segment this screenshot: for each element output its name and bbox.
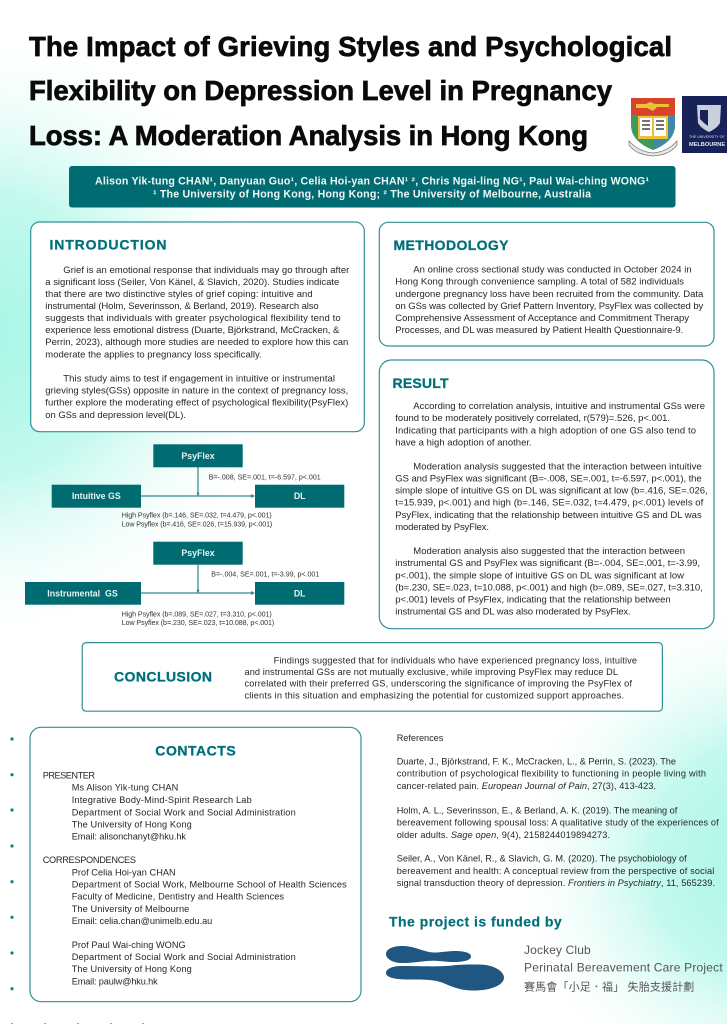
text: conclusion body: clients in this situation and emphasizing the potential for customized support approaches. xyxy=(244,690,624,700)
text: methodology body: on GSs was collected by Grief Pattern Inventory, PsyFlex was collected by xyxy=(395,301,704,312)
simple slopes xyxy=(122,512,272,529)
contact: correspondences: The University of Melbourne xyxy=(72,904,189,914)
diagram: instrumental GS moderation xyxy=(25,542,344,627)
text: methodology body: Processes, and DL was measured by Patient Health Questionnaire-9. xyxy=(395,325,683,336)
reference: Seiler: Seiler, A., Von Känel, R., & Slavich, G. M. (2020). The psychobiology of xyxy=(397,854,687,864)
text: introduction body xyxy=(45,265,349,421)
reference: Seiler xyxy=(397,854,715,888)
text: result body: instrumental GS and PsyFlex was significant (B=-.004, SE=.001, t=-3.99, xyxy=(395,558,700,569)
panel: introduction xyxy=(31,222,364,432)
logo: University of Melbourne xyxy=(682,96,727,153)
text: methodology body: undergone pregnancy loss have been recruited from the community. Data xyxy=(395,289,704,300)
contact: correspondences: Prof Celia Hoi-yan CHAN xyxy=(72,867,176,877)
text: funder name: Perinatal Bereavement Care Project xyxy=(524,960,723,974)
box: Instrumental GS xyxy=(25,582,141,605)
text: introduction body: grieving styles(GSs) opposite in nature in the context of pregnancy loss, xyxy=(45,386,348,396)
references: References xyxy=(397,733,444,743)
reference: Duarte: cancer-related pain. European Journal of Pain, 27(3), 413-423. xyxy=(397,781,656,791)
text: methodology body: Comprehensive Assessment of Acceptance and Commitment Therapy xyxy=(395,313,689,324)
path statistics: B=-.004, SE=.001, t=-3.99, p<.001 xyxy=(211,571,319,579)
box: Intuitive GS xyxy=(52,485,141,508)
contact: presenter: The University of Hong Kong xyxy=(72,819,192,829)
logo: University of Melbourne: THE UNIVERSITY OF xyxy=(689,135,725,139)
text: introduction body: suggests that individuals with greater psychological flexibility tend to xyxy=(45,313,341,324)
text: conclusion body xyxy=(244,655,637,700)
reference: Seiler: bereavement and health: A conceptual review from the perspective of social xyxy=(397,866,714,876)
icon: funder logo footprints xyxy=(386,946,504,990)
panel: methodology xyxy=(379,222,714,346)
reference: Holm: Holm, A. L., Severinsson, E., & Berland, A. K. (2019). The meaning of xyxy=(397,805,678,815)
reference: Duarte xyxy=(397,757,706,791)
text: result body: GS and PsyFlex was significant (B=-.008, SE=.001, t=-6.597, p<.001), the xyxy=(395,474,702,484)
title: Flexibility on Depression Level in Pregnancy xyxy=(29,75,613,106)
contact: correspondences: CORRESPONDENCES xyxy=(43,855,136,865)
heading: methodology: METHODOLOGY xyxy=(394,237,509,253)
heading: introduction: INTRODUCTION xyxy=(50,236,166,252)
box: PsyFlex: PsyFlex xyxy=(181,451,215,461)
text: funder name: 賽馬會「小足．福」 失胎支援計劃 xyxy=(524,980,694,994)
text: introduction body: a significant loss (Seiler, Von Känel, & Slavich, 2020). Studies indicate xyxy=(45,277,339,288)
reference: Holm: older adults. Sage open, 9(4), 2158244019894273. xyxy=(397,830,610,840)
panel: conclusion xyxy=(82,643,662,711)
author banner xyxy=(69,166,676,208)
panel: contacts xyxy=(30,727,361,1002)
logo: University of Hong Kong crest xyxy=(629,98,677,156)
text: introduction body: that there are two distinctive styles of grief coping: intuitive and xyxy=(45,289,313,300)
simple slopes xyxy=(122,610,274,627)
text: introduction body: on GSs and depression level(DL). xyxy=(45,410,186,421)
text: result body: According to correlation analysis, intuitive and instrumental GSs were xyxy=(413,401,705,412)
text: result body: instrumental GS and DL was also moderated by PsyFlex. xyxy=(395,606,631,618)
box: PsyFlex: PsyFlex xyxy=(181,548,215,558)
reference: Holm: bereavement following spousal loss: A qualitative study of the experiences of xyxy=(397,818,719,828)
text: funder name xyxy=(524,943,723,994)
text: result body: PsyFlex, indicating that the relationship between intuitive GS and DL was xyxy=(395,510,702,521)
text: funder name: Jockey Club xyxy=(524,943,591,957)
text: introduction body: experience less emotional distress (Duarte, Björkstrand, McCracken, & xyxy=(45,325,340,336)
title: Loss: A Moderation Analysis in Hong Kong xyxy=(29,120,588,151)
reference: Duarte: contribution of psychological flexibility to functioning in people living with xyxy=(397,769,706,779)
text: result body: found to be moderately positively correlated, r(579)=.526, p<.001. xyxy=(395,413,670,424)
text: methodology body: An online cross sectional study was conducted in October 2024 in xyxy=(413,264,692,276)
text: result body xyxy=(395,401,708,618)
bottom edge markers xyxy=(11,1023,144,1024)
text: result body: p<.001), the simple slope of intuitive GS on DL was significant at low xyxy=(395,570,684,582)
simple slopes: Low Psyflex (b=.416, SE=.026, t=15.939, p<.001) xyxy=(122,521,272,529)
contact: presenter: Email: alisonchanyt@hku.hk xyxy=(72,832,186,842)
text: result body: have a high adoption of another. xyxy=(395,438,532,448)
text: result body: simple slope of intuitive GS on DL was significant at low (b=.416, SE=.026, xyxy=(395,486,708,496)
box: DL xyxy=(255,485,344,508)
contact: correspondences: Faculty of Medicine, Dentistry and Health Sciences xyxy=(72,892,284,902)
contact: correspondences: The University of Hong Kong xyxy=(72,964,192,974)
contact: correspondences: Prof Paul Wai-ching WONG xyxy=(72,940,186,950)
path statistics: B=-.008, SE=.001, t=-6.597, p<.001 xyxy=(209,474,321,482)
title xyxy=(29,31,672,151)
contact: presenter: Integrative Body-Mind-Spirit Research Lab xyxy=(72,795,252,805)
text: result body: (b=.230, SE=.023, t=10.088, p<.001) and high (b=.089, SE=.027, t=3.310, xyxy=(395,582,703,593)
text: result body: Moderation analysis suggested that the interaction between intuitive xyxy=(413,462,702,472)
text: introduction body: moderate the applies to pregnancy loss specifically. xyxy=(45,350,262,360)
heading: contacts: CONTACTS xyxy=(155,742,236,758)
logo: University of Melbourne: MELBOURNE xyxy=(689,142,725,148)
contact: correspondences xyxy=(43,855,347,986)
bullet markers xyxy=(10,737,14,990)
contact: presenter: Department of Social Work and Social Administration xyxy=(72,807,296,817)
references xyxy=(397,733,719,888)
authors: Alison Yik-tung CHAN¹, Danyuan Guo¹, Celia Hoi-yan CHAN¹ ², Chris Ngai-ling NG¹, Paul Wai-ching WONG¹ xyxy=(95,176,649,188)
contact: presenter: Ms Alison Yik-tung CHAN xyxy=(72,783,178,793)
box: Intuitive GS: Intuitive GS xyxy=(72,491,121,501)
heading: conclusion: CONCLUSION xyxy=(114,668,212,684)
contact: correspondences: Email: celia.chan@unimelb.edu.au xyxy=(72,916,212,926)
title: The Impact of Grieving Styles and Psychological xyxy=(29,31,672,62)
reference: Duarte: Duarte, J., Björkstrand, F. K., McCracken, L., & Perrin, S. (2023). The xyxy=(397,757,676,767)
box: Instrumental GS: Instrumental GS xyxy=(47,588,118,598)
text: introduction body: Perrin, 2023), although more studies are needed to explore how this can xyxy=(45,337,348,348)
text: result body: p<.001) levels of PsyFlex, indicating that the relationship between xyxy=(395,594,671,606)
text: result body: moderated by PsyFlex. xyxy=(395,522,489,533)
simple slopes: High Psyflex (b=.146, SE=.032, t=4.479, p<.001) xyxy=(122,512,272,520)
contact: correspondences: Department of Social Work and Social Administration xyxy=(72,952,296,962)
text: conclusion body: and instrumental GSs are not mutually exclusive, while improving PsyFlex may reduce DL xyxy=(244,667,618,677)
box: DL: DL xyxy=(294,491,306,501)
text: introduction body: instrumental (Holm, Severinsson, & Berland, 2019). Research also xyxy=(45,301,319,312)
contact: presenter xyxy=(43,770,296,842)
contact: correspondences: Department of Social Work, Melbourne School of Health Sciences xyxy=(72,880,347,890)
reference: Seiler: signal transduction theory of depression. Frontiers in Psychiatry, 11, 565239. xyxy=(397,878,715,888)
heading: result: RESULT xyxy=(392,375,449,391)
text: result body: t=15.939, p<.001) and high (b=.146, SE=.032, t=4.479, p<.001) levels of xyxy=(395,498,704,508)
text: methodology body xyxy=(395,264,704,336)
simple slopes: High Psyflex (b=.089, SE=.027, t=3.310, p<.001) xyxy=(122,610,272,618)
text: introduction body: This study aims to test if engagement in intuitive or instrumental xyxy=(63,374,335,384)
diagram: intuitive GS moderation xyxy=(52,444,344,529)
box: PsyFlex xyxy=(153,542,243,565)
box: DL: DL xyxy=(294,588,306,598)
text: result body: Indicating that participants with a high adoption of one GS also tend to xyxy=(395,425,696,436)
reference: Holm xyxy=(397,805,719,840)
simple slopes: Low Psyflex (b=.230, SE=.023, t=10.088, p<.001) xyxy=(122,619,274,627)
contact: presenter: PRESENTER xyxy=(43,770,95,780)
box: DL xyxy=(255,582,344,605)
panel: result xyxy=(379,360,714,629)
text: conclusion body: correlated with their preferred GS, underscoring the significance of improving the PsyFlex of xyxy=(244,678,632,688)
contact: correspondences: Email: paulw@hku.hk xyxy=(72,976,158,986)
author banner: ¹ The University of Hong Kong, Hong Kong; ² The University of Melbourne, Australia xyxy=(153,188,591,200)
box: PsyFlex xyxy=(153,444,243,467)
text: introduction body: further explore the moderating effect of psychological flexibility(PsyFlex) xyxy=(45,398,348,408)
text: methodology body: Hong Kong through convenience sampling. A total of 582 individuals xyxy=(395,276,684,288)
text: conclusion body: Findings suggested that for individuals who have experienced pregnancy loss, intuitive xyxy=(274,655,637,665)
text: result body: Moderation analysis also suggested that the interaction between xyxy=(413,546,685,557)
text: introduction body: Grief is an emotional response that individuals may go through after xyxy=(63,265,349,276)
heading: funder: The project is funded by xyxy=(389,914,562,930)
